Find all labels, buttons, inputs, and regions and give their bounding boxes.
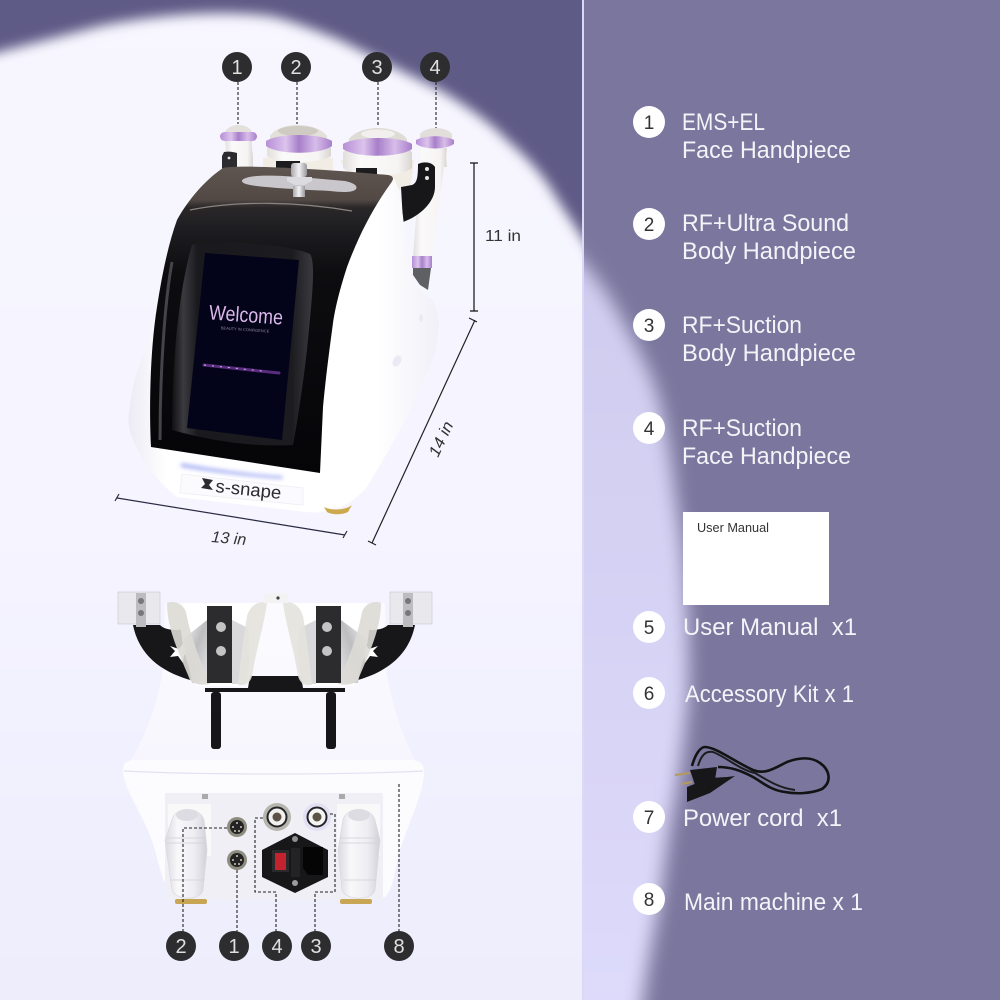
- item 5: [633, 611, 857, 643]
- dimension: width: 13 in: [211, 529, 247, 549]
- power cord illustration: [675, 747, 829, 802]
- rear panel: [165, 793, 383, 900]
- bottle left: [165, 804, 211, 898]
- bottle right: [337, 804, 380, 898]
- top tab: [264, 593, 288, 603]
- holder clip right: [390, 592, 432, 627]
- background: left panel: [0, 0, 582, 1000]
- black arc right: [350, 625, 415, 682]
- leader lines: [183, 784, 399, 932]
- item 2: RF+Ultra Sound: [682, 210, 849, 237]
- tagline: BEAUTY IN CONFIDENCE: [221, 325, 270, 334]
- screen bezel: [172, 242, 313, 445]
- item list: [633, 106, 863, 916]
- socket: [303, 847, 323, 875]
- callout 2: [281, 52, 311, 124]
- item 3: 3: [644, 316, 654, 337]
- body foot: [324, 505, 352, 514]
- connector 1 upper: [227, 817, 247, 837]
- item 6: 6: [644, 684, 654, 705]
- dimension: depth: [368, 318, 477, 545]
- background: right panel: [584, 0, 1000, 1000]
- dimension: height: [470, 163, 521, 311]
- callout 4 rear: [262, 931, 292, 961]
- bracket: [401, 162, 435, 222]
- background: divider: [581, 0, 585, 1000]
- posts: [211, 692, 336, 749]
- mount screws: [202, 794, 345, 799]
- callout 8 rear: [384, 931, 414, 961]
- item 8: Main machine x 1: [684, 889, 863, 916]
- logo plate: [180, 474, 303, 505]
- callout 1 rear: [219, 931, 249, 961]
- glow strip: [181, 463, 283, 479]
- item 3: [633, 309, 856, 367]
- item 2: [633, 208, 856, 265]
- handpiece 1: [220, 125, 257, 170]
- progress bar: [204, 365, 279, 373]
- handpiece 4: [412, 128, 454, 290]
- item 1: Face Handpiece: [682, 137, 851, 164]
- white body shell: [128, 168, 439, 513]
- welcome text: Welcome: [208, 301, 284, 330]
- callout 1 rear: 1: [228, 936, 240, 958]
- callout 3: [362, 52, 392, 126]
- black arc left: [133, 625, 198, 682]
- rear dome: [130, 603, 416, 762]
- item 1: EMS+EL: [682, 109, 765, 136]
- callout 3 rear: [301, 931, 331, 961]
- machine: rear view: [118, 592, 432, 904]
- screen: [187, 253, 299, 440]
- item 8: 8: [644, 890, 654, 911]
- callout 1: [222, 52, 252, 124]
- brand mark: [201, 478, 213, 490]
- item 3: RF+Suction: [682, 312, 802, 339]
- callout 1: 1: [231, 57, 243, 79]
- item 4: Face Handpiece: [682, 443, 851, 470]
- callout 3 rear: 3: [310, 936, 322, 958]
- callout 2 rear: [166, 931, 196, 961]
- rocker switch: [272, 850, 289, 872]
- callout 2 rear: 2: [175, 936, 187, 958]
- side indents: [391, 314, 423, 368]
- item 2: 2: [644, 215, 654, 236]
- user manual card: User Manual: [697, 520, 769, 535]
- callout 4 rear: 4: [271, 936, 283, 958]
- dimension: height: 11 in: [485, 228, 521, 245]
- item 1: [633, 106, 851, 164]
- callout 3: 3: [371, 57, 383, 79]
- callout 4: [420, 52, 450, 128]
- callout 4: 4: [429, 57, 441, 79]
- dimension: width: [115, 494, 347, 549]
- top callout numbers: [222, 52, 450, 128]
- item 7: 7: [644, 808, 654, 829]
- item 4: RF+Suction: [682, 415, 802, 442]
- brand name: s-snape: [215, 476, 282, 503]
- machine: front view: [128, 125, 454, 514]
- item 4: [633, 412, 851, 470]
- connector 2 lower: [227, 850, 247, 870]
- cup right: [283, 602, 381, 686]
- holder clip left: [118, 592, 160, 627]
- item 7: Power cord x1: [683, 805, 842, 832]
- black front panel: [150, 167, 393, 473]
- user manual card: [683, 512, 829, 605]
- rear base: [123, 760, 424, 897]
- item 7: [633, 801, 842, 833]
- fuse block: [291, 848, 300, 877]
- fold highlight: [190, 203, 352, 211]
- item 3: Body Handpiece: [682, 340, 856, 367]
- dimension: depth: 14 in: [426, 419, 457, 460]
- top control plate: [242, 176, 357, 192]
- cup left: [167, 602, 267, 686]
- callout 2: 2: [290, 57, 302, 79]
- item 6: Accessory Kit x 1: [685, 681, 854, 708]
- feet: [175, 899, 372, 904]
- item 6: [633, 677, 854, 709]
- mounting bar: [205, 676, 345, 692]
- item 8: [633, 883, 863, 916]
- callout 8 rear: 8: [393, 936, 405, 958]
- bottom callouts: [166, 784, 414, 961]
- item 5: User Manual x1: [683, 614, 857, 641]
- item 5: 5: [644, 618, 654, 639]
- item 4: 4: [644, 419, 655, 440]
- handpiece 2: [263, 125, 333, 170]
- handpiece 3: [340, 128, 414, 192]
- item 1: 1: [644, 113, 654, 134]
- item 2: Body Handpiece: [682, 238, 856, 265]
- base seam: [124, 771, 423, 774]
- power module: [262, 833, 328, 893]
- connector 3 large grey: [263, 803, 291, 831]
- connector 4 lilac: [303, 803, 331, 831]
- control knob: [287, 163, 312, 197]
- left edge reflection: [160, 262, 172, 440]
